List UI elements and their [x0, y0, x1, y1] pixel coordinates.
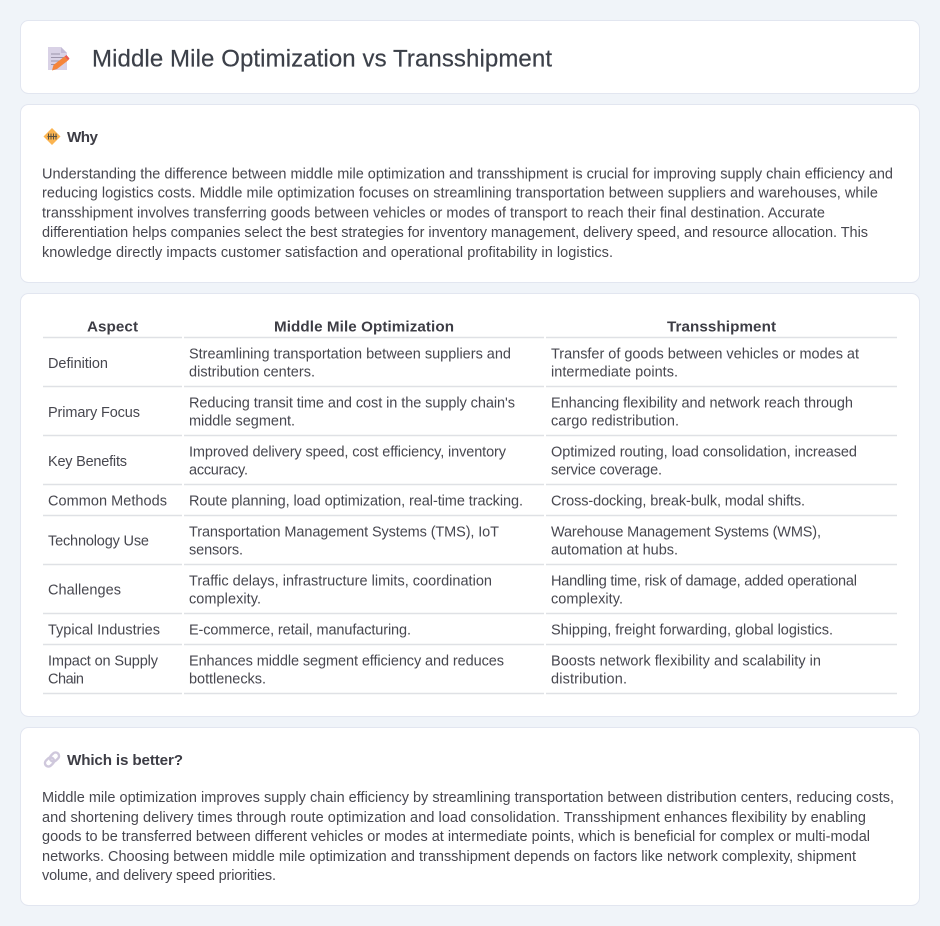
text block: why explanation: transshipment involves transferring goods between vehicles or modes of transport to reach their final destination. Accurate [42, 206, 825, 222]
row: definition: Streamlining transportation between suppliers and [189, 346, 511, 362]
row: typical industries: Shipping, freight forwarding, global logistics. [551, 622, 833, 638]
text block: why explanation [42, 166, 893, 261]
row: key benefits [48, 444, 857, 478]
text block: why explanation: knowledge directly impacts customer satisfaction and operational profitability in logistics. [42, 245, 613, 261]
table header row: Middle Mile Optimization [274, 318, 454, 336]
row: definition: distribution centers. [189, 364, 315, 380]
row: key benefits: accuracy. [189, 462, 248, 478]
row: impact on supply chain: bottlenecks. [189, 672, 266, 688]
title: Middle Mile Optimization vs Transshipment [92, 46, 552, 72]
text block: why explanation: differentiation helps companies select the best strategies for inventory management, delivery speed, and resource allocation. This [42, 225, 868, 241]
row: common methods [48, 494, 805, 510]
row: technology use: Transportation Management Systems (TMS), IoT [189, 524, 499, 540]
text block: verdict: and shortening delivery times through route optimization and load consolidation. Transshipment enhances flexibility by enabling [42, 810, 866, 826]
row: definition: Transfer of goods between vehicles or modes at [551, 346, 859, 362]
row: technology use: Warehouse Management Systems (WMS), [551, 524, 821, 540]
row: key benefits: Key Benefits [48, 454, 127, 470]
row: key benefits: Optimized routing, load consolidation, increased [551, 444, 857, 460]
row: impact on supply chain: Impact on Supply [48, 654, 159, 670]
icon: diamond warning sign [44, 128, 60, 145]
heading: which is better: Which is better? [67, 752, 183, 769]
text block: verdict: volume, and delivery speed priorities. [42, 868, 276, 884]
text block: why explanation: reducing logistics costs. Middle mile optimization focuses on streamlining transportation between suppliers and warehouses, while [42, 186, 878, 202]
row: definition [48, 346, 859, 380]
row: definition: Definition [48, 356, 108, 372]
panel: comparison table [20, 294, 920, 716]
row: technology use [48, 524, 821, 558]
row: primary focus: Enhancing flexibility and network reach through [551, 396, 853, 412]
row: technology use: Technology Use [48, 534, 149, 550]
row: primary focus: middle segment. [189, 414, 295, 430]
row: primary focus: cargo redistribution. [551, 414, 679, 430]
row: technology use: sensors. [189, 542, 243, 558]
row: impact on supply chain: Boosts network flexibility and scalability in [551, 654, 821, 670]
table header row [87, 318, 776, 336]
row: challenges: Traffic delays, infrastructure limits, coordination [189, 574, 492, 590]
row: primary focus: Reducing transit time and cost in the supply chain's [189, 396, 515, 412]
row: challenges: Handling time, risk of damage, added operational [551, 574, 857, 590]
text block: verdict: Middle mile optimization improves supply chain efficiency by streamlining transportation between distribution centers, reducing costs, [42, 790, 894, 806]
row: typical industries: Typical Industries [48, 622, 160, 638]
row: challenges: complexity. [189, 592, 261, 608]
row: common methods: Route planning, load optimization, real-time tracking. [189, 494, 523, 510]
row: impact on supply chain: Chain [48, 672, 84, 688]
table header row: Transshipment [667, 318, 776, 336]
text block: verdict [42, 790, 894, 884]
row: definition: intermediate points. [551, 364, 678, 380]
icon: chain link [43, 751, 61, 768]
heading: why: Why [67, 129, 99, 146]
row: impact on supply chain: Enhances middle segment efficiency and reduces [189, 654, 504, 670]
table header row: Aspect [87, 318, 138, 336]
text block: verdict: networks. Choosing between middle mile optimization and transshipment depends on factors like network complexity, shipment [42, 849, 856, 865]
row: technology use: automation at hubs. [551, 542, 678, 558]
row: impact on supply chain [48, 654, 821, 688]
row: challenges: complexity. [551, 592, 623, 608]
row: challenges [48, 574, 857, 608]
panel: which is better [20, 728, 920, 906]
text block: why explanation: Understanding the difference between middle mile optimization and transshipment is crucial for improving supply chain efficiency and [42, 166, 893, 182]
row: primary focus [48, 396, 853, 430]
row: primary focus: Primary Focus [48, 405, 140, 421]
text block: verdict: goods to be transferred between different vehicles or modes at intermediate points, which is beneficial for complex or multi-modal [42, 829, 870, 845]
panel: why [20, 104, 920, 282]
row: impact on supply chain: distribution. [551, 672, 627, 688]
row: typical industries [48, 622, 833, 638]
panel: title header [20, 20, 920, 94]
row: key benefits: service coverage. [551, 462, 662, 478]
icon: document with pencil [48, 47, 70, 70]
row: common methods: Cross-docking, break-bulk, modal shifts. [551, 494, 805, 510]
row: challenges: Challenges [48, 582, 121, 598]
row: common methods: Common Methods [48, 494, 167, 510]
row: typical industries: E-commerce, retail, manufacturing. [189, 622, 411, 638]
row: key benefits: Improved delivery speed, cost efficiency, inventory [189, 444, 507, 460]
